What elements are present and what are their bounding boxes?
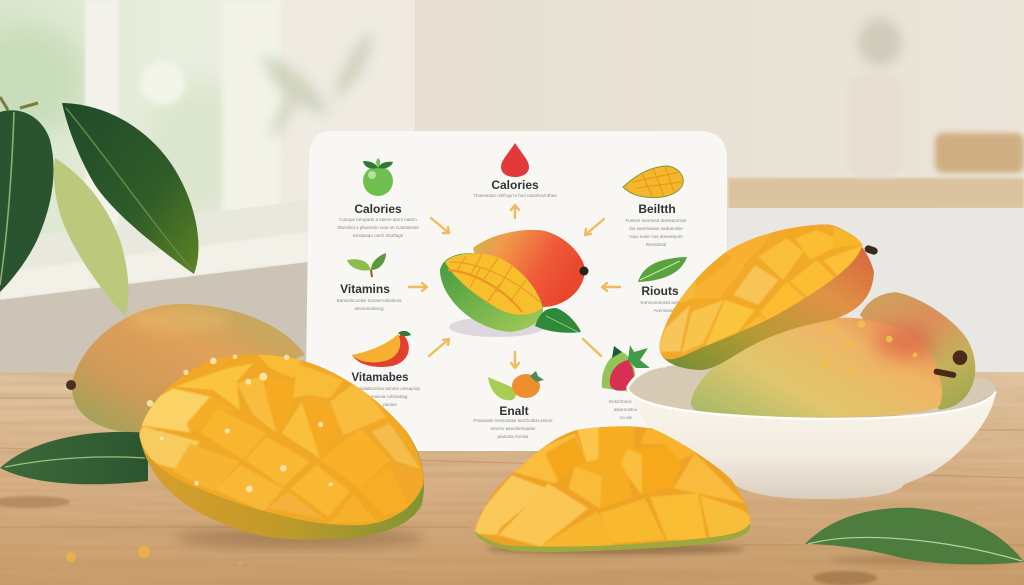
item: mango slice vitamabes: paoias	[383, 402, 397, 407]
item: green leaf riouts: Konvonomasd anslut	[641, 300, 684, 305]
item: red drop calories: Thaevedas ninfcup to fuel nasahovinthae	[473, 193, 557, 198]
item: fruit right: Enscrtosoc hasv	[609, 399, 644, 404]
item: green leaf riouts	[638, 257, 687, 313]
item: mango slice vitamabes: Vitamabes	[352, 370, 409, 384]
item: fruit right: asiaroustoio	[614, 407, 639, 412]
item: apple calories: tivisitasqu ooch dootfage	[353, 233, 404, 238]
whole mango stem	[937, 372, 953, 375]
item: mango slice vitamabes	[352, 331, 420, 407]
cut mango	[659, 224, 874, 370]
bowl body	[627, 388, 996, 499]
bowl interior	[627, 366, 996, 415]
background room	[0, 0, 1024, 380]
item: mango slice bellth: Fusses toomesd doestaomsie	[625, 218, 687, 223]
item: apple calories: Calories	[354, 202, 402, 216]
back mango	[860, 292, 975, 410]
item: mango slice bellth: fos saneiwaws eadoeoisle	[629, 226, 683, 231]
water drops	[794, 321, 917, 375]
cut mango center foreground	[475, 426, 750, 558]
item: red drop calories: Calories	[491, 178, 539, 192]
item: leaf pair vitamins: Bansolocoolse toomeroolsalons	[337, 298, 402, 303]
item: mango slice bellth: Rensitetal	[646, 242, 666, 247]
whole mango blush	[873, 328, 933, 358]
item: leaf pair vitamins: asvoonsalacig	[354, 306, 384, 311]
water drops on table	[66, 546, 242, 564]
item: apple calories: Cusque tomparts a stems atom nation	[339, 217, 417, 222]
item: mango slice bellth	[623, 166, 687, 247]
infographic card	[305, 131, 727, 451]
item: apple calories	[337, 158, 419, 238]
item: leaf pair vitamins	[337, 253, 402, 311]
stem	[868, 249, 874, 251]
table	[0, 372, 1024, 585]
item: mango slice bellth: Beiltth	[638, 202, 676, 216]
item: apple calories: blandied a phonenin was on Casatiness	[337, 225, 419, 230]
item: fruits enalt: Enalt	[499, 404, 529, 418]
left whole mango	[66, 304, 305, 433]
item: fruits enalt: Prasoade ensoostasi tosClusbsi asnoe	[473, 418, 553, 423]
item: leaf pair vitamins: Vitamins	[340, 282, 390, 296]
item: fruit right: no alc	[620, 415, 633, 420]
leaf on table left	[0, 432, 148, 484]
item: red drop calories	[473, 143, 557, 198]
cut mango left foreground	[139, 354, 424, 552]
item: fruit right	[602, 345, 650, 420]
arrows	[409, 205, 620, 368]
item: mango slice vitamabes: Sasulatiaonisa tamela oinsapiop	[354, 386, 420, 391]
leaf on table right	[805, 508, 1024, 566]
cut mango flesh	[659, 224, 862, 360]
item: green leaf riouts: Avenosisd	[653, 308, 675, 313]
central mango illustration	[440, 230, 588, 337]
bowl rim highlight	[627, 388, 996, 419]
item: mango slice bellth: ropo eusir nos doswstyuin	[629, 234, 683, 239]
item: green leaf riouts: Riouts	[641, 284, 679, 298]
item: fruits enalt	[473, 371, 553, 439]
back mango stem	[953, 350, 967, 365]
item: fruits enalt: piasorla rionsia	[498, 434, 529, 439]
bowl with mangoes	[620, 215, 996, 499]
whole mango	[691, 318, 942, 417]
leaves top left	[0, 97, 198, 316]
item: fruits enalt: sevroo asaoitemaalas	[491, 426, 536, 431]
item: mango slice vitamabes: masvia colosatiag	[371, 394, 408, 399]
